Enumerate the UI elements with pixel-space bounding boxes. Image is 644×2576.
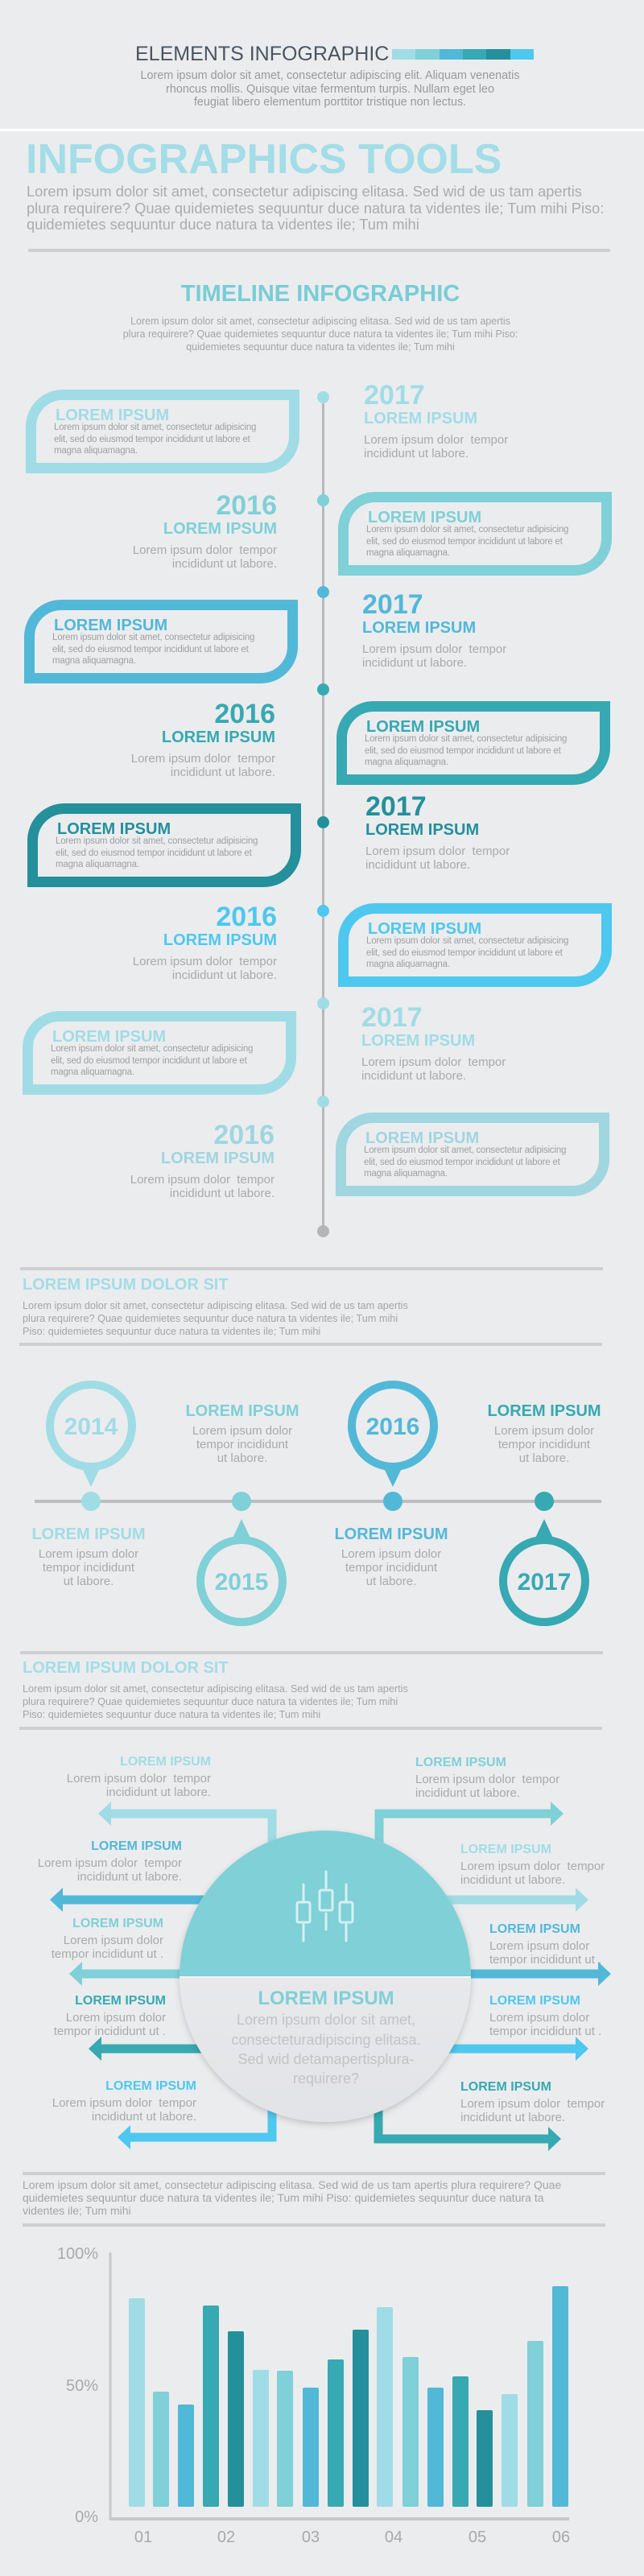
bar chart: 02 bbox=[217, 2529, 235, 2546]
pin label 2016 bottom: Lorem ipsum dolor bbox=[341, 1547, 441, 1561]
text 2017 row 5: Lorem ipsum dolor tempor bbox=[365, 844, 510, 858]
timeline dots bbox=[317, 391, 329, 1237]
box 8: Lorem ipsum dolor sit amet, consectetur adipisicing bbox=[364, 1146, 566, 1155]
label R1 bbox=[415, 1756, 559, 1800]
pin label 2017 top: ut labore. bbox=[519, 1451, 569, 1465]
box 2 bbox=[338, 492, 612, 576]
text 2016 row 2 bbox=[133, 490, 277, 571]
section text 2: plura requirere? Quae quidemietes sequuntur duce natura ta videntes ile; Tum mihi bbox=[23, 1696, 398, 1707]
label L1 bbox=[67, 1755, 211, 1799]
text 2016 row 6: Lorem ipsum dolor tempor bbox=[133, 955, 277, 968]
central circle bbox=[180, 1831, 471, 2122]
label R2 bbox=[460, 1843, 605, 1887]
box 7: elit, sed do eiusmod tempor incididunt ut labore et bbox=[51, 1056, 247, 1066]
box 7 bbox=[23, 1011, 296, 1095]
box 7: LOREM IPSUM bbox=[52, 1028, 166, 1046]
label R3: tempor incididunt ut . bbox=[489, 1953, 601, 1967]
box 3: magna aliquamagna. bbox=[52, 656, 136, 666]
header text: rhoncus mollis. Quisque vitae fermentum turpis. Nullam eget leo bbox=[166, 82, 494, 95]
label R4 bbox=[489, 1994, 601, 2038]
label R2: LOREM IPSUM bbox=[460, 1843, 551, 1856]
text 2016 row 6 bbox=[133, 902, 277, 982]
box 6: magna aliquamagna. bbox=[366, 960, 450, 969]
timeline intro: Lorem ipsum dolor sit amet, consectetur adipiscing elitasa. Sed wid de us tam apertis bbox=[130, 316, 510, 327]
pin label 2017 top: Lorem ipsum dolor bbox=[494, 1424, 594, 1438]
box 5: LOREM IPSUM bbox=[57, 820, 171, 838]
text 2017 row 7: incididunt ut labore. bbox=[361, 1069, 466, 1083]
header title: ELEMENTS INFOGRAPHIC bbox=[135, 43, 389, 65]
text 2017 row 3: Lorem ipsum dolor tempor bbox=[362, 642, 506, 656]
intro paragraph: plura requirere? Quae quidemietes sequuntur duce natura ta videntes ile; Tum mihi Piso: bbox=[27, 200, 604, 216]
label L1: LOREM IPSUM bbox=[120, 1755, 211, 1769]
text 2016 row 4: 2016 bbox=[214, 699, 275, 729]
text 2016 row 4 bbox=[131, 699, 275, 779]
box 2: elit, sed do eiusmod tempor incididunt ut labore et bbox=[366, 536, 563, 546]
pin label 2015 top: ut labore. bbox=[217, 1451, 267, 1465]
box 4: LOREM IPSUM bbox=[366, 718, 480, 736]
text 2017 row 7: LOREM IPSUM bbox=[361, 1032, 475, 1050]
text 2016 row 8 bbox=[130, 1120, 275, 1200]
label L1: Lorem ipsum dolor tempor bbox=[67, 1772, 211, 1785]
text 2016 row 8: incididunt ut labore. bbox=[170, 1187, 275, 1200]
label L2: LOREM IPSUM bbox=[91, 1839, 182, 1853]
box 6: Lorem ipsum dolor sit amet, consectetur adipisicing bbox=[366, 936, 568, 946]
pin 2014: 2014 bbox=[64, 1414, 118, 1440]
bar chart: 05 bbox=[469, 2529, 486, 2546]
section text 2 bbox=[23, 1683, 408, 1720]
circle text: Sed wid detamapertisplura- bbox=[237, 2051, 415, 2067]
label R4: Lorem ipsum dolor bbox=[489, 2011, 589, 2025]
label R4: tempor incididunt ut . bbox=[489, 2025, 601, 2038]
box 1: elit, sed do eiusmod tempor incididunt ut labore et bbox=[54, 435, 250, 444]
label L2 bbox=[38, 1839, 182, 1884]
main title: INFOGRAPHICS TOOLS bbox=[26, 136, 502, 183]
label L2: incididunt ut labore. bbox=[77, 1870, 182, 1884]
box 5: elit, sed do eiusmod tempor incididunt ut labore et bbox=[56, 848, 252, 858]
text 2017 row 7: Lorem ipsum dolor tempor bbox=[361, 1055, 506, 1069]
label R2: incididunt ut labore. bbox=[460, 1873, 565, 1887]
box 8: magna aliquamagna. bbox=[364, 1169, 448, 1179]
box 6 bbox=[338, 903, 612, 987]
vertical timeline bbox=[322, 397, 324, 1231]
box 1: magna aliquamagna. bbox=[54, 446, 138, 456]
label L5: LOREM IPSUM bbox=[105, 2079, 196, 2093]
text 2016 row 4: LOREM IPSUM bbox=[162, 729, 275, 746]
label R1: LOREM IPSUM bbox=[415, 1756, 506, 1769]
label L1: incididunt ut labore. bbox=[106, 1785, 211, 1799]
section text 1 bbox=[23, 1300, 408, 1337]
label R3: Lorem ipsum dolor bbox=[489, 1939, 589, 1953]
text 2016 row 2: incididunt ut labore. bbox=[172, 557, 277, 571]
box 4 bbox=[336, 701, 610, 785]
pin label 2017 top: LOREM IPSUM bbox=[487, 1402, 601, 1420]
section heading 1: LOREM IPSUM DOLOR SIT bbox=[23, 1276, 229, 1294]
label R3 bbox=[489, 1922, 601, 1967]
label R4: LOREM IPSUM bbox=[489, 1994, 580, 2008]
text 2016 row 6: LOREM IPSUM bbox=[163, 931, 277, 949]
text 2017 row 7: 2017 bbox=[361, 1002, 423, 1033]
box 6: elit, sed do eiusmod tempor incididunt ut labore et bbox=[366, 948, 563, 958]
circle text bbox=[231, 1988, 421, 2087]
box 4: Lorem ipsum dolor sit amet, consectetur adipisicing bbox=[365, 734, 567, 744]
box 6: LOREM IPSUM bbox=[368, 920, 481, 938]
text 2016 row 2: LOREM IPSUM bbox=[163, 520, 277, 538]
label R3: LOREM IPSUM bbox=[489, 1922, 580, 1936]
chart description: quidemietes sequuntur duce natura ta videntes ile; Tum mihi Piso: quidemietes sequuntur duce natura ta bbox=[23, 2191, 544, 2204]
text 2016 row 8: 2016 bbox=[213, 1120, 275, 1150]
label L4 bbox=[54, 1994, 166, 2038]
label L3: tempor incididunt ut . bbox=[52, 1947, 163, 1961]
header text bbox=[140, 69, 520, 109]
arrows left bbox=[50, 1802, 272, 2149]
label L4: tempor incididunt ut . bbox=[54, 2025, 166, 2038]
section text 2: Piso: quidemietes sequuntur duce natura ta videntes ile; Tum mihi bbox=[23, 1709, 320, 1720]
intro paragraph: quidemietes sequuntur duce natura ta videntes ile; Tum mihi bbox=[27, 216, 419, 233]
pin label 2014 bottom: tempor incididunt bbox=[43, 1561, 134, 1575]
text 2017 row 3 bbox=[362, 589, 506, 670]
box 7: Lorem ipsum dolor sit amet, consectetur adipisicing bbox=[51, 1044, 253, 1054]
intro paragraph: Lorem ipsum dolor sit amet, consectetur adipiscing elitasa. Sed wid de us tam apertis bbox=[27, 183, 582, 200]
pin label 2016 bottom: tempor incididunt bbox=[345, 1561, 437, 1575]
text 2017 row 1: Lorem ipsum dolor tempor bbox=[364, 433, 508, 447]
text 2016 row 8: LOREM IPSUM bbox=[161, 1150, 275, 1167]
section text 1: plura requirere? Quae quidemietes sequuntur duce natura ta videntes ile; Tum mihi bbox=[23, 1313, 398, 1324]
label R5: LOREM IPSUM bbox=[460, 2080, 551, 2094]
timeline heading: TIMELINE INFOGRAPHIC bbox=[181, 281, 460, 307]
box 1 bbox=[26, 390, 299, 473]
box 4: elit, sed do eiusmod tempor incididunt ut labore et bbox=[365, 745, 561, 755]
pin label 2015 top: LOREM IPSUM bbox=[185, 1402, 299, 1420]
label R5: incididunt ut labore. bbox=[460, 2111, 565, 2124]
label R1: incididunt ut labore. bbox=[415, 1786, 520, 1800]
box 2: magna aliquamagna. bbox=[366, 548, 450, 558]
box 8: LOREM IPSUM bbox=[365, 1129, 479, 1147]
box 1: LOREM IPSUM bbox=[56, 407, 169, 424]
section text 1: Lorem ipsum dolor sit amet, consectetur adipiscing elitasa. Sed wid de us tam apertis bbox=[23, 1300, 408, 1311]
timeline intro: quidemietes sequuntur duce natura ta videntes ile; Tum mihi bbox=[186, 341, 455, 353]
pin 2016: 2016 bbox=[366, 1414, 419, 1440]
label L3 bbox=[52, 1917, 163, 1961]
label R5 bbox=[460, 2080, 605, 2124]
pin 2014 bbox=[50, 1385, 132, 1511]
text 2016 row 2: 2016 bbox=[216, 490, 277, 521]
text 2017 row 5: LOREM IPSUM bbox=[365, 821, 479, 839]
text 2016 row 8: Lorem ipsum dolor tempor bbox=[130, 1173, 275, 1187]
text 2017 row 3: 2017 bbox=[362, 589, 423, 620]
pin label 2016 bottom bbox=[334, 1525, 448, 1588]
text 2017 row 3: incididunt ut labore. bbox=[362, 656, 467, 670]
label R1: Lorem ipsum dolor tempor bbox=[415, 1773, 559, 1786]
text 2016 row 6: 2016 bbox=[216, 902, 277, 932]
text 2017 row 1: incididunt ut labore. bbox=[364, 447, 469, 460]
timeline intro bbox=[123, 316, 518, 353]
pin label 2017 top bbox=[487, 1402, 601, 1465]
pin 2015 bbox=[200, 1492, 283, 1622]
arrows right bbox=[378, 1802, 611, 2151]
text 2017 row 3: LOREM IPSUM bbox=[362, 619, 476, 637]
text 2016 row 4: Lorem ipsum dolor tempor bbox=[131, 752, 275, 766]
label L4: Lorem ipsum dolor bbox=[66, 2011, 166, 2025]
text 2017 row 5: incididunt ut labore. bbox=[365, 858, 470, 872]
text 2017 row 1: LOREM IPSUM bbox=[364, 410, 477, 427]
pin 2015: 2015 bbox=[215, 1569, 268, 1596]
text 2016 row 2: Lorem ipsum dolor tempor bbox=[133, 543, 277, 557]
icon: candlestick chart bbox=[297, 1872, 353, 1941]
horizontal pin timeline bbox=[35, 1381, 601, 1626]
bar chart: 50% bbox=[66, 2377, 98, 2395]
pin label 2015 top: tempor incididunt bbox=[196, 1438, 288, 1451]
circle text: Lorem ipsum dolor sit amet, bbox=[237, 2012, 415, 2028]
box 2: Lorem ipsum dolor sit amet, consectetur adipisicing bbox=[366, 525, 568, 535]
bar chart: 01 bbox=[134, 2529, 152, 2546]
box 5: Lorem ipsum dolor sit amet, consectetur adipisicing bbox=[56, 836, 258, 846]
pin label 2014 bottom bbox=[31, 1525, 146, 1588]
box 8: elit, sed do eiusmod tempor incididunt ut labore et bbox=[364, 1158, 560, 1167]
section text 2: Lorem ipsum dolor sit amet, consectetur adipiscing elitasa. Sed wid de us tam apertis bbox=[23, 1683, 408, 1695]
intro paragraph bbox=[27, 183, 604, 233]
pin label 2016 bottom: ut labore. bbox=[366, 1575, 416, 1588]
text 2017 row 1: 2017 bbox=[364, 380, 425, 411]
pin label 2014 bottom: Lorem ipsum dolor bbox=[39, 1547, 138, 1561]
bar chart: 100% bbox=[57, 2245, 98, 2263]
header text: Lorem ipsum dolor sit amet, consectetur adipiscing elit. Aliquam venenatis bbox=[140, 69, 520, 82]
circle text: consecteturadipiscing elitasa. bbox=[231, 2032, 421, 2048]
timeline intro: plura requirere? Quae quidemietes sequuntur duce natura ta videntes ile; Tum mihi Piso: bbox=[123, 328, 518, 340]
chart description: Lorem ipsum dolor sit amet, consectetur adipiscing elitasa. Sed wid de us tam apertis plura requirere? Quae bbox=[23, 2178, 561, 2191]
bar chart: 0% bbox=[75, 2508, 98, 2526]
pin label 2014 bottom: ut labore. bbox=[64, 1575, 114, 1588]
pin label 2015 top bbox=[185, 1402, 299, 1465]
text 2017 row 1 bbox=[364, 380, 508, 460]
label L4: LOREM IPSUM bbox=[75, 1994, 166, 2008]
circle text: LOREM IPSUM bbox=[258, 1988, 394, 2009]
label R2: Lorem ipsum dolor tempor bbox=[460, 1860, 605, 1873]
text 2017 row 5 bbox=[365, 791, 510, 872]
box 5 bbox=[27, 803, 301, 887]
pin label 2015 top: Lorem ipsum dolor bbox=[192, 1424, 292, 1438]
label L3: Lorem ipsum dolor bbox=[64, 1934, 163, 1947]
box 3 bbox=[24, 600, 298, 683]
box 2: LOREM IPSUM bbox=[368, 509, 481, 526]
box 3: elit, sed do eiusmod tempor incididunt ut labore et bbox=[52, 644, 249, 654]
text 2016 row 4: incididunt ut labore. bbox=[171, 766, 275, 779]
box 3: LOREM IPSUM bbox=[54, 617, 167, 634]
section text 1: Piso: quidemietes sequuntur duce natura ta videntes ile; Tum mihi bbox=[23, 1326, 320, 1337]
label L2: Lorem ipsum dolor tempor bbox=[38, 1856, 182, 1870]
pin 2017: 2017 bbox=[518, 1569, 571, 1596]
label L5: Lorem ipsum dolor tempor bbox=[52, 2096, 196, 2110]
box 4: magna aliquamagna. bbox=[365, 758, 448, 767]
section heading 2: LOREM IPSUM DOLOR SIT bbox=[23, 1659, 229, 1677]
pin label 2016 bottom: LOREM IPSUM bbox=[334, 1525, 448, 1543]
header text: feugiat libero elementum porttitor tristique non lectus. bbox=[194, 96, 466, 109]
label L5 bbox=[52, 2079, 196, 2124]
box 1: Lorem ipsum dolor sit amet, consectetur adipisicing bbox=[54, 423, 256, 432]
box 3: Lorem ipsum dolor sit amet, consectetur adipisicing bbox=[52, 633, 254, 642]
bar chart: 04 bbox=[385, 2529, 402, 2546]
label L5: incididunt ut labore. bbox=[92, 2110, 196, 2124]
box 8 bbox=[336, 1113, 609, 1196]
circle text: requirere? bbox=[293, 2070, 359, 2087]
bar chart bbox=[57, 2245, 570, 2546]
label R5: Lorem ipsum dolor tempor bbox=[460, 2097, 605, 2111]
box 5: magna aliquamagna. bbox=[56, 860, 139, 869]
chart description bbox=[23, 2178, 561, 2217]
chart description: videntes ile; Tum mihi bbox=[23, 2204, 131, 2217]
label L3: LOREM IPSUM bbox=[72, 1917, 163, 1930]
pin 2016 bbox=[352, 1385, 434, 1511]
text 2016 row 6: incididunt ut labore. bbox=[172, 968, 277, 982]
pin 2017 bbox=[503, 1492, 585, 1622]
pin label 2014 bottom: LOREM IPSUM bbox=[31, 1525, 146, 1543]
color bar bbox=[392, 49, 534, 60]
bar chart: 06 bbox=[552, 2529, 570, 2546]
bar chart: 03 bbox=[302, 2529, 320, 2546]
pin label 2017 top: tempor incididunt bbox=[498, 1438, 590, 1451]
text 2017 row 5: 2017 bbox=[365, 791, 427, 822]
radial diagram bbox=[50, 1802, 611, 2151]
box 7: magna aliquamagna. bbox=[51, 1067, 134, 1077]
text 2017 row 7 bbox=[361, 1002, 506, 1083]
